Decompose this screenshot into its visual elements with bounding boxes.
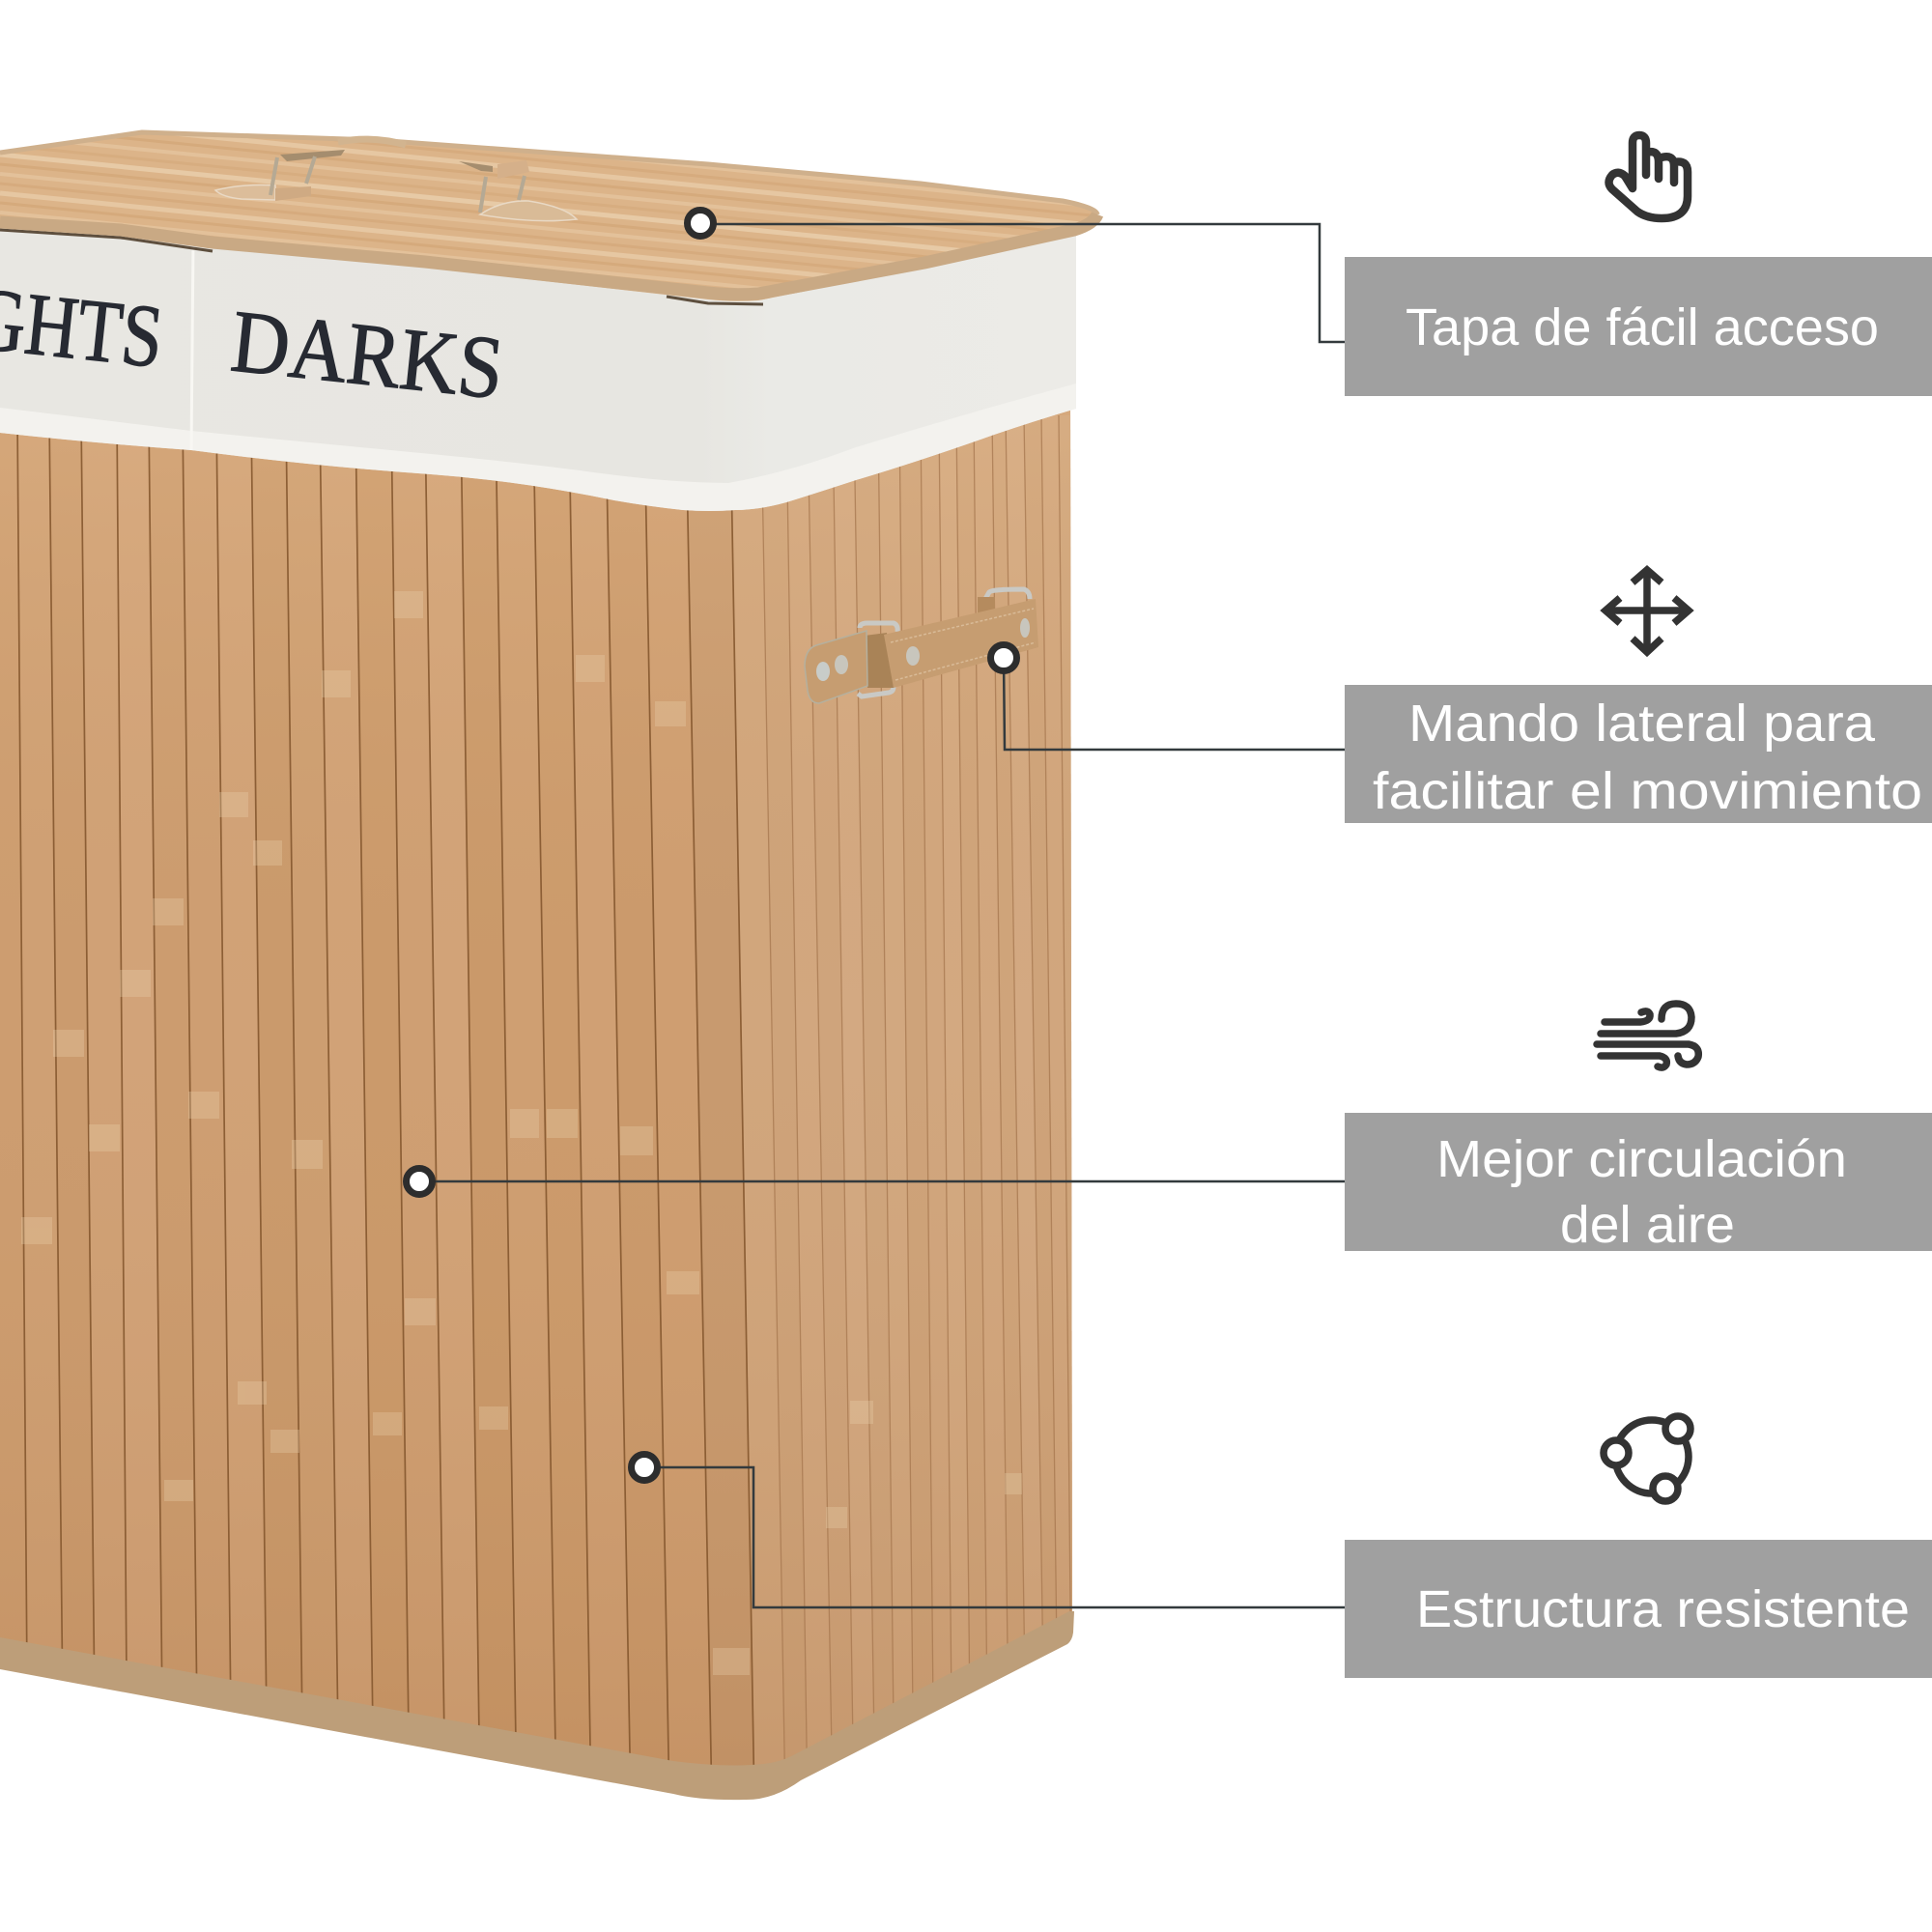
fabric liner band [0,217,1076,511]
label text line 1: Mejor circulación [1436,1130,1847,1188]
icon: wind [1597,1004,1698,1067]
fabric text: darks: DARKS [227,291,508,417]
panel: label aire [1345,1113,1932,1254]
icon: move arrows [1605,570,1689,652]
panel: label estructura [1345,1540,1932,1678]
label text line 2: facilitar el movimiento [1373,762,1922,820]
callout: air leader line [419,1180,1345,1182]
marker dot: handle [991,645,1016,670]
callout: lid leader line [699,224,1345,342]
hamper bamboo slats [0,386,1082,1816]
panel: label mando [1345,685,1932,823]
hamper base trim [0,1611,1074,1800]
label text line 2: del aire [1560,1196,1735,1254]
icon: pointing hand [1609,135,1688,218]
icon: structure nodes [1604,1416,1690,1501]
callout: handle leader line [1004,658,1345,750]
lid handle straps [215,139,577,221]
label text: Tapa de fácil acceso [1406,298,1879,356]
panel: bamboo laundry hamper [0,39,1101,1816]
hamper lid [0,129,1103,305]
side handle [805,589,1038,703]
label text line 1: Mando lateral para [1408,695,1876,753]
panel: label tapa [1345,257,1932,396]
label text: Estructura resistente [1416,1580,1910,1638]
marker dot: air [406,1169,433,1194]
marker dot: structure [632,1455,657,1480]
marker dot: lid [688,211,713,236]
callout: structure leader line [643,1467,1345,1607]
